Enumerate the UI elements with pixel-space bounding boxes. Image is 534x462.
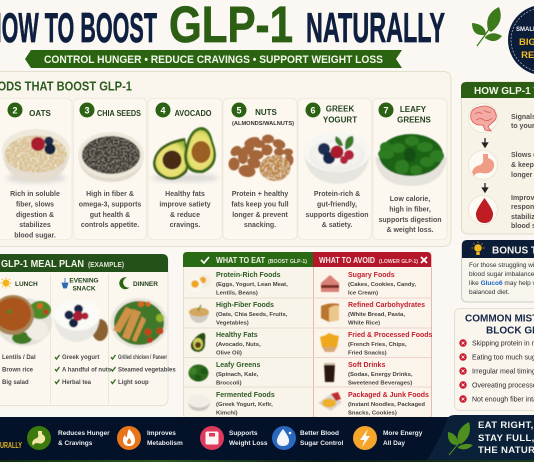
row: refined carbohydrates: Refined Carbohydrates [348, 302, 425, 309]
heading: what to avoid [313, 252, 431, 267]
panel: common mistakes [454, 308, 534, 410]
bottom banner [0, 417, 534, 462]
benefit: reduces hunger: Reduces Hunger [58, 430, 110, 437]
row: leafy greens: Leafy Greens [216, 362, 260, 369]
row: leafy greens: (Spinach, Kale, [216, 372, 259, 378]
icon: light bulb [472, 242, 484, 255]
row: fried and processed foods: (French Fries, Chips, [348, 342, 407, 348]
row: high-fiber foods: (Oats, Chia Seeds, Fruits, [216, 312, 288, 318]
column: lunch: Big salad [2, 380, 29, 386]
row: healthy fats: (Avocado, Nuts, [216, 342, 261, 348]
icon: fiber bowl [189, 305, 209, 323]
row: refined carbohydrates: (White Bread, Pasta, [348, 312, 405, 318]
row: protein-rich foods: (Eggs, Yogurt, Lean Meat, [216, 282, 288, 288]
column: evening snack: Herbal tea [62, 380, 92, 386]
image: lentil plate [0, 295, 52, 346]
row: fried and processed foods: Fried & Processed Foods [348, 332, 433, 339]
benefit: improves metabolism: Improves [147, 430, 176, 437]
row: protein-rich foods: Lentils, Beans) [216, 290, 258, 296]
image: avocado halves [151, 127, 219, 182]
heading: what to avoid: (LOWER GLP-1) [379, 259, 418, 265]
row: leafy greens [188, 362, 260, 386]
card: avocado: AVOCADO [174, 109, 212, 118]
title [0, 0, 445, 53]
icon: bread [321, 303, 339, 322]
card: greek yogurt: 6 [310, 106, 316, 116]
card: nuts [228, 102, 294, 229]
column: dinner: Light soup [118, 380, 149, 386]
row: packaged and junk foods: Packaged & Junk Foods [348, 392, 429, 399]
icon: sun [0, 278, 12, 288]
icons: checks [55, 355, 60, 384]
benefit: improves metabolism [117, 426, 183, 450]
heading: how GLP-1 works [461, 82, 534, 98]
card: nuts: 5 [236, 106, 242, 116]
row: sugary foods [321, 272, 416, 296]
icon: greens [188, 364, 208, 382]
card: chia seeds: controls appetite. [81, 222, 139, 229]
icon: stomach [468, 150, 498, 180]
card: greek yogurt: Protein-rich & [314, 191, 360, 198]
column: lunch [0, 278, 52, 386]
column: evening snack: SNACK [72, 286, 96, 292]
image: yogurt bowl [304, 132, 370, 184]
image: almonds and walnuts [228, 134, 294, 181]
column: evening snack: EVENING [69, 278, 99, 284]
icon: glass [62, 278, 68, 288]
column: evening snack: A handful of nuts [62, 368, 112, 374]
card: oats: Rich in soluble [10, 191, 60, 198]
badge [508, 5, 534, 75]
row: fried and processed foods: Fried Snacks) [348, 350, 387, 356]
text: effects: longer [511, 172, 533, 179]
card: nuts: NUTS [255, 108, 278, 117]
card: oats: fiber, slows [16, 202, 54, 208]
row: protein-rich foods: Protein-Rich Foods [216, 272, 281, 279]
card: chia seeds: CHIA SEEDS [97, 109, 142, 118]
card: greek yogurt: GREEK [326, 104, 354, 114]
row: refined carbohydrates: White Rice) [348, 320, 380, 326]
row: fermented foods: Kimchi) [216, 410, 238, 416]
benefit: supports weight loss: Supports [229, 430, 258, 437]
panel: how GLP-1 works [461, 82, 534, 234]
heading: what to eat [183, 252, 313, 267]
heading: what to eat: (BOOST GLP-1) [268, 259, 307, 265]
card: avocado: & reduce [170, 212, 200, 219]
heading: meal plan: GLP-1 MEAL PLAN [1, 258, 84, 270]
card: nuts: snacking. [244, 222, 276, 229]
card: leafy greens: LEAFY [400, 105, 427, 114]
card: leafy greens: 7 [383, 106, 389, 116]
row: high-fiber foods: Vegetables) [216, 320, 249, 326]
icon: leaf sprig [472, 7, 502, 46]
card: greek yogurt [304, 102, 370, 229]
icon: blood drop [468, 196, 498, 224]
column: evening snack: Greek yogurt [62, 355, 99, 361]
card: oats: blood sugar. [14, 232, 56, 240]
column: dinner: Grilled chicken / Paneer [118, 355, 167, 361]
row: high-fiber foods: High-Fiber Foods [216, 302, 274, 309]
row: fermented foods: Fermented Foods [216, 392, 275, 399]
benefit: reduces hunger: & Cravings [58, 440, 93, 447]
card: chia seeds: gut health & [90, 212, 130, 219]
row: fermented foods [188, 392, 275, 416]
image: spinach bowl [375, 134, 447, 186]
card: nuts: Protein + healthy [232, 191, 288, 198]
card: chia seeds: 3 [84, 106, 90, 116]
column: dinner: DINNER [133, 281, 158, 288]
panel: what to eat [183, 252, 314, 418]
icon: leaves [448, 422, 473, 455]
row: high-fiber foods [189, 302, 288, 326]
text: tip: balanced diet. [469, 289, 510, 296]
list: mistakes [459, 339, 534, 404]
row: fermented foods: (Greek Yogurt, Kefir, [216, 402, 273, 408]
heading: meal plan: (EXAMPLE) [88, 262, 124, 269]
card: avocado: improve satiety [159, 202, 211, 208]
icons: checks [111, 355, 116, 384]
icon: brain [468, 104, 498, 132]
image: chia bowl [78, 132, 144, 182]
icon: fries [320, 333, 339, 352]
heading: what to eat: WHAT TO EAT [216, 256, 265, 265]
benefit: improves metabolism: Metabolism [147, 440, 183, 447]
arrow [482, 138, 488, 147]
row: soft drinks: Sweetened Beverages) [348, 380, 412, 386]
image: oats bowl [2, 129, 70, 183]
card: leafy greens: high in fiber, [389, 206, 431, 214]
row: leafy greens: Broccoli) [216, 380, 242, 386]
benefit: more energy: All Day [383, 440, 405, 447]
card: oats: stabilizes [19, 222, 51, 229]
benefit: supports weight loss [200, 426, 268, 450]
benefit: reduces hunger [27, 426, 110, 450]
closing message panel [427, 415, 534, 460]
row: sugary foods: Ice Cream) [348, 290, 378, 296]
card: chia seeds [78, 102, 144, 229]
column: evening snack [54, 278, 112, 386]
row: healthy fats: Healthy Fats [216, 332, 258, 339]
benefit: better blood sugar control [272, 426, 344, 450]
card: leafy greens: GREENS [397, 116, 432, 124]
column: lunch: LUNCH [15, 281, 38, 288]
row: fried and processed foods [320, 332, 433, 356]
card: nuts: (ALMONDS/WALNUTS) [232, 121, 294, 127]
icon: cake [321, 275, 339, 292]
card: avocado [151, 102, 219, 229]
subtitle ribbon: CONTROL HUNGER • REDUCE CRAVINGS • SUPPORT WEIGHT LOSS [44, 54, 383, 66]
benefit: supports weight loss: Weight Loss [229, 440, 268, 447]
list: mistakes: Irregular meal timing [472, 368, 534, 376]
card backgrounds [0, 98, 447, 240]
card: oats: digestion & [16, 212, 54, 219]
benefit: better blood sugar control: Better Blood [300, 430, 339, 437]
arrow [482, 183, 488, 192]
heading: what to avoid: WHAT TO AVOID [319, 256, 375, 265]
panel: what to avoid [313, 252, 433, 418]
card: avocado: 4 [160, 106, 166, 116]
panel: bonus tips [462, 240, 534, 302]
card: leafy greens: supports digestion [378, 217, 442, 224]
card: chia seeds: High in fiber & [86, 191, 134, 198]
card: greek yogurt: YOGURT [323, 116, 357, 124]
icon: avocado [191, 333, 205, 352]
row: healthy fats [191, 332, 261, 356]
row: protein-rich foods [188, 272, 288, 296]
card: greek yogurt: & satiety. [322, 222, 352, 229]
card: nuts: longer & prevent [232, 212, 288, 219]
card: chia seeds: omega-3, supports [79, 202, 141, 208]
icon: eggs [188, 274, 211, 292]
row: packaged and junk foods: Snacks, Cookies) [348, 410, 397, 416]
benefit: more energy: More Energy [383, 430, 423, 437]
icon: snacks tray [318, 392, 342, 411]
panel: meal plan [0, 254, 176, 406]
card: greek yogurt: supports digestion [306, 212, 368, 219]
card: oats: OATS [29, 109, 51, 118]
row: packaged and junk foods: (Instant Noodles, Packaged [348, 402, 425, 408]
row: refined carbohydrates [321, 302, 425, 326]
row: sugary foods: Sugary Foods [348, 272, 395, 279]
panel: foods that boost GLP-1 [0, 72, 451, 246]
icon: cola glass [324, 363, 335, 382]
card: leafy greens: Low calorie, [390, 196, 430, 203]
row: sugary foods: (Cakes, Cookies, Candy, [348, 282, 416, 288]
row: healthy fats: Olive Oil) [216, 350, 242, 356]
card: avocado: Healthy fats [165, 191, 205, 198]
row: soft drinks: Soft Drinks [348, 362, 385, 369]
image: yogurt and nuts [54, 300, 108, 342]
card: avocado: cravings. [170, 222, 200, 229]
card: greek yogurt: gut-friendly, [317, 202, 357, 208]
column: dinner [110, 277, 176, 386]
card: oats: 2 [12, 106, 18, 116]
benefit: better blood sugar control: Sugar Control [300, 440, 344, 447]
card: leafy greens: & weight loss. [386, 227, 434, 234]
benefit: more energy [353, 426, 423, 450]
column: lunch: Brown rice [2, 368, 34, 374]
image: chicken plate [110, 298, 168, 348]
card: oats [2, 102, 70, 240]
column: lunch: Lentils / Dal [2, 355, 36, 361]
card: leafy greens [375, 102, 447, 234]
row: soft drinks [324, 362, 413, 386]
subtitle ribbon [25, 50, 402, 68]
card: nuts: fats keep you full [231, 202, 289, 208]
row: soft drinks: (Sodas, Energy Drinks, [348, 372, 413, 378]
icon: moon [119, 277, 130, 289]
icon: fermented bowl [188, 394, 210, 411]
row: packaged and junk foods [318, 392, 429, 416]
heading: meal plan [0, 254, 168, 272]
column: dinner: Steamed vegetables [118, 368, 176, 374]
